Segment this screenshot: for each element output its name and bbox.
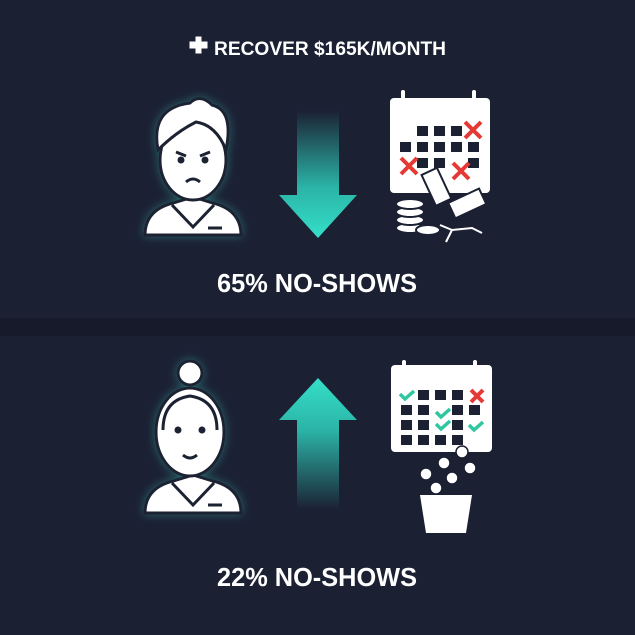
stat: 22% no-shows: 22% NO-SHOWS	[217, 562, 417, 592]
stat: 65% no-shows: 65% NO-SHOWS	[217, 268, 417, 298]
icon: smiling person	[145, 361, 241, 513]
icon: calendar with X marks and money	[390, 90, 490, 242]
icon: frustrated person	[145, 98, 241, 235]
arrow: up	[279, 378, 357, 510]
arrow: down	[279, 110, 357, 238]
title: RECOVER $165K/MONTH	[214, 39, 446, 60]
icon: calendar with checks and coins into cup	[391, 360, 492, 533]
